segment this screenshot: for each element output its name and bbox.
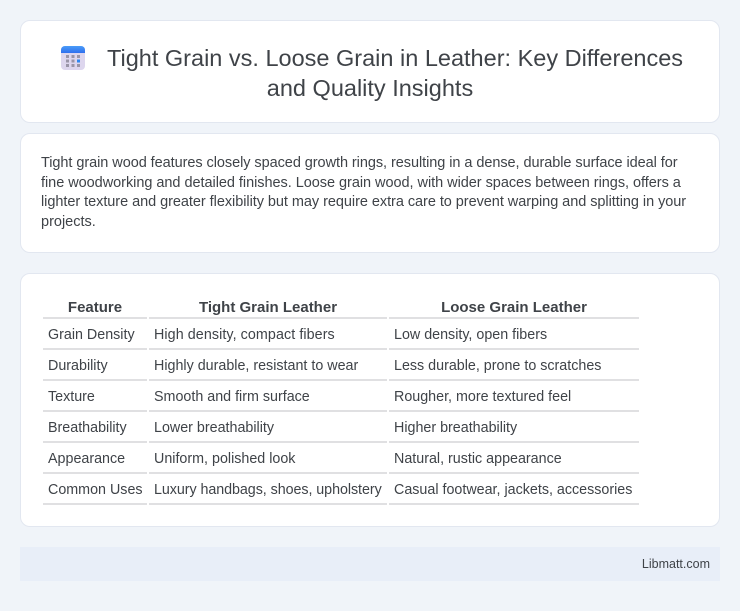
icon: calendar grid bbox=[61, 46, 85, 70]
row: Durability: Less durable, prone to scratches bbox=[394, 358, 601, 374]
row: Appearance: Uniform, polished look bbox=[154, 451, 295, 467]
panel: introduction text bbox=[20, 133, 720, 253]
panel: comparison table bbox=[20, 273, 720, 527]
row: Breathability bbox=[48, 420, 518, 436]
row: Texture: Texture bbox=[48, 389, 95, 405]
row: Grain Density: Low density, open fibers bbox=[394, 327, 547, 343]
text block: summary: fine woodworking and detailed finishes. Loose grain wood, with wider spaces between rings, offers a bbox=[41, 174, 681, 190]
row: Breathability: Breathability bbox=[48, 420, 127, 436]
footer credit: Libmatt.com bbox=[642, 557, 710, 571]
table header: Feature: Feature bbox=[68, 299, 122, 316]
row: Common Uses: Casual footwear, jackets, accessories bbox=[394, 482, 632, 498]
row: Common Uses: Luxury handbags, shoes, upholstery bbox=[154, 482, 382, 498]
row: Appearance: Appearance bbox=[48, 451, 125, 467]
row: Texture: Smooth and firm surface bbox=[154, 389, 310, 405]
row: Durability bbox=[48, 358, 601, 374]
row: Grain Density: High density, compact fibers bbox=[154, 327, 335, 343]
row: Common Uses: Common Uses bbox=[48, 482, 143, 498]
row: Common Uses bbox=[48, 482, 632, 498]
panel: header bbox=[20, 20, 720, 123]
text block: summary: Tight grain wood features closely spaced growth rings, resulting in a dense, durable surface ideal for bbox=[41, 155, 678, 171]
title: Tight Grain vs. Loose Grain in Leather: Key Differences bbox=[107, 45, 683, 71]
text block: summary bbox=[41, 155, 686, 230]
table header: Tight Grain Leather: Tight Grain Leather bbox=[199, 299, 337, 316]
table header: Loose Grain Leather: Loose Grain Leather bbox=[441, 299, 587, 316]
row: Breathability: Lower breathability bbox=[154, 420, 274, 436]
text block: summary: projects. bbox=[41, 214, 96, 230]
row: Grain Density: Grain Density bbox=[48, 327, 135, 343]
row: Grain Density bbox=[48, 327, 547, 343]
row: Durability: Highly durable, resistant to wear bbox=[154, 358, 358, 374]
row: Breathability: Higher breathability bbox=[394, 420, 517, 436]
footer bar bbox=[20, 547, 720, 581]
row: Appearance: Natural, rustic appearance bbox=[394, 451, 562, 467]
row: Appearance bbox=[48, 451, 562, 467]
row: Texture bbox=[48, 389, 571, 405]
title bbox=[107, 45, 683, 101]
title: and Quality Insights bbox=[267, 75, 473, 101]
row: Durability: Durability bbox=[48, 358, 108, 374]
row: Texture: Rougher, more textured feel bbox=[394, 389, 571, 405]
text block: summary: lighter texture and greater flexibility but may require extra care to prevent warping and splitting in your bbox=[41, 194, 686, 210]
